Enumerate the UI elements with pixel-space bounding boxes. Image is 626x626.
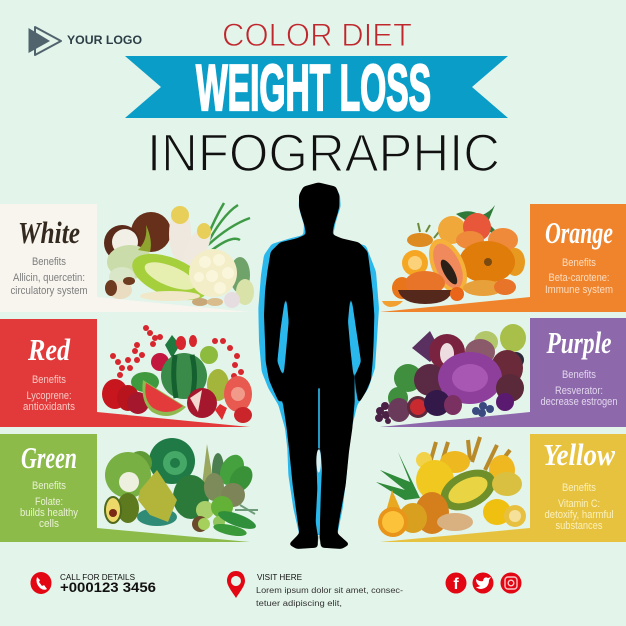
title: color diet: COLOR DIET [222, 17, 412, 53]
benefits text: yellow: Benefits [562, 482, 596, 494]
benefits text: red [23, 374, 75, 413]
food: yellow fruits [376, 437, 526, 537]
panel: white [0, 203, 254, 312]
food: orange fruits [382, 205, 525, 307]
heading: white: White [18, 215, 80, 250]
footer: address: Lorem ipsum dolor sit amet, consec- [256, 586, 403, 595]
food: white vegetables [104, 203, 254, 310]
icon: phone [30, 572, 52, 594]
benefits text: green: builds healthy [20, 507, 78, 519]
food: red fruits [102, 325, 252, 423]
heading: yellow: Yellow [543, 437, 615, 472]
benefits text: orange: Benefits [562, 257, 596, 269]
benefits text: red: antioxidants [23, 401, 75, 413]
panel: red [0, 319, 252, 427]
benefits text: purple: Benefits [562, 369, 596, 381]
benefits text: yellow: substances [556, 520, 603, 532]
title: infographic: INFOGRAPHIC [147, 124, 500, 183]
logo: YOUR LOGO [67, 35, 142, 47]
benefits text: white: Allicin, quercetin: [13, 272, 85, 284]
benefits text: white: circulatory system [10, 285, 88, 297]
benefits text: red: Benefits [32, 374, 66, 386]
benefits text: orange [545, 257, 613, 296]
benefits text: green [20, 480, 78, 530]
benefits text: white [10, 256, 88, 297]
benefits text: white: Benefits [32, 256, 66, 268]
food: green vegetables [105, 438, 258, 538]
panel: green [0, 434, 258, 542]
food: purple vegetables [375, 324, 526, 424]
benefits text: green: Folate: [35, 496, 63, 508]
benefits text: orange: Beta-carotene: [548, 272, 610, 284]
footer: address: VISIT HERE [257, 573, 302, 582]
footer: address: tetuer adipiscing elit, [256, 599, 342, 608]
footer: social icons [446, 572, 522, 594]
ribbon banner [125, 51, 508, 124]
icon: map pin [227, 571, 245, 598]
heading: red: Red [27, 332, 70, 367]
footer: phone contact: CALL FOR DETAILS [60, 573, 135, 582]
panel: orange [380, 204, 626, 312]
icon: twitter [472, 572, 494, 594]
benefits text: purple [540, 369, 618, 408]
benefits text: green: Benefits [32, 480, 66, 492]
footer: phone contact: +000123 3456 [60, 579, 156, 595]
benefits text: yellow [544, 482, 614, 532]
logo [28, 27, 142, 55]
benefits text: yellow: detoxify, harmful [544, 509, 614, 521]
footer: address [227, 571, 403, 608]
icon: instagram [500, 572, 522, 594]
footer: phone contact [30, 572, 156, 595]
panel: yellow [376, 434, 626, 542]
icon: facebook: f [453, 576, 459, 593]
benefits text: purple: Resverator: [555, 385, 603, 397]
benefits text: red: Lycoprene: [26, 390, 72, 402]
benefits text: orange: Immune system [545, 284, 613, 296]
benefits text: yellow: Vitamin C: [558, 498, 600, 510]
heading: green: Green [21, 440, 77, 475]
benefits text: green: cells [39, 518, 59, 530]
panel: purple [375, 318, 626, 427]
silhouette: human body with blue outline [258, 182, 379, 549]
